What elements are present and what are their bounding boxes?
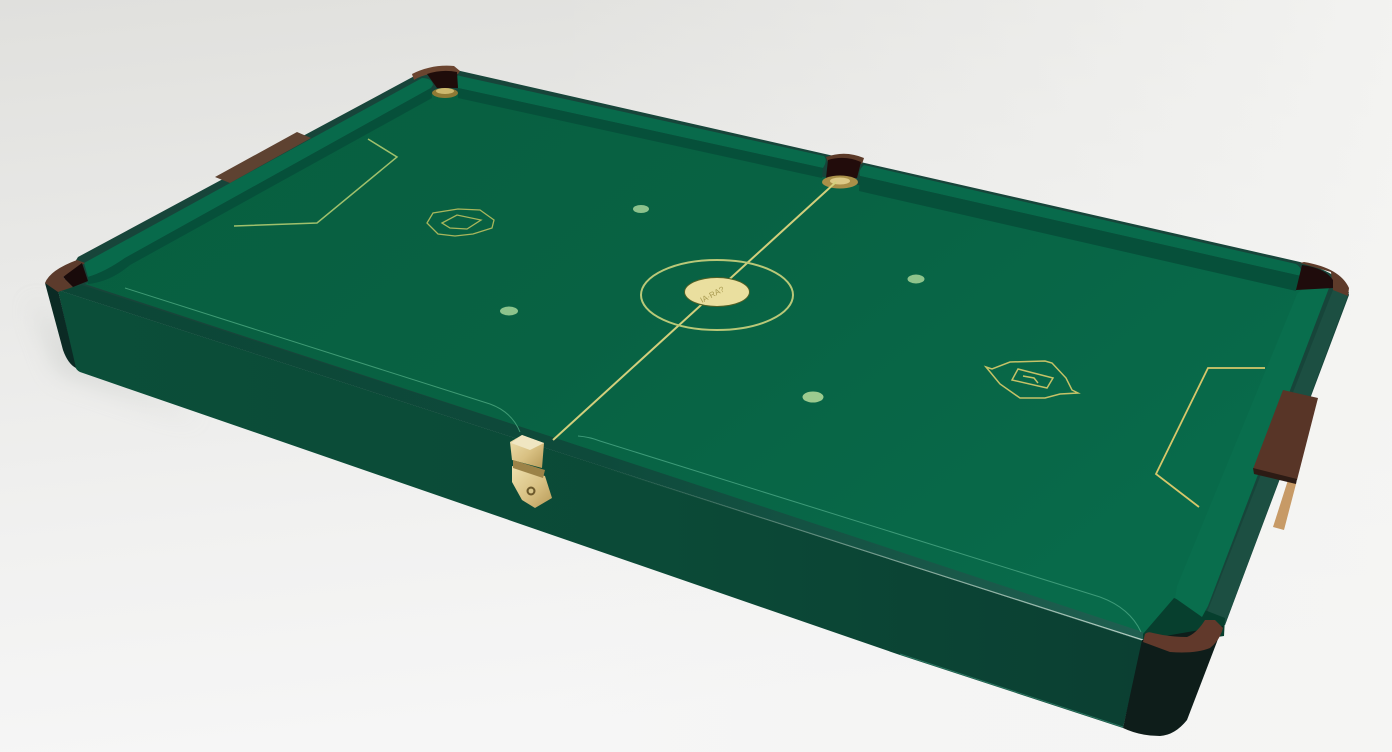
corner pocket: back right: [1296, 262, 1349, 296]
corner cap: front right: [1123, 620, 1223, 736]
corner pocket: back left: [412, 66, 460, 98]
goal box: left: [234, 139, 397, 226]
spot: upper right: [908, 274, 924, 284]
corner pocket: left: [45, 260, 88, 292]
centre circle: [641, 260, 793, 330]
table shadow: [32, 300, 200, 420]
back and side outer rail: [58, 68, 1349, 641]
left dark corner edge: [45, 283, 76, 368]
centre line: [553, 182, 836, 440]
cushion: back rail right: [859, 165, 1301, 291]
centre emblem text: IA·RA?: [699, 284, 726, 305]
playing surface felt: [85, 90, 1312, 634]
emblem: left: [427, 209, 494, 236]
leather strap: left rail: [215, 132, 311, 183]
cushion: right rail: [1143, 288, 1349, 648]
latch: brass clasp: [510, 435, 552, 508]
cushion: front rail left and right: [58, 285, 1143, 641]
cushion: left rail: [84, 78, 433, 284]
side pocket: back middle: [822, 154, 864, 188]
spot: lower right: [802, 392, 824, 402]
spot: lower left: [500, 306, 518, 316]
leather strap and buckle: right rail: [1253, 390, 1318, 530]
front wall of table case: [45, 283, 1143, 728]
goal box: right: [1156, 368, 1265, 507]
cushion: back rail left: [457, 76, 826, 178]
emblem: right: [986, 361, 1078, 398]
spot: upper left: [633, 205, 649, 213]
